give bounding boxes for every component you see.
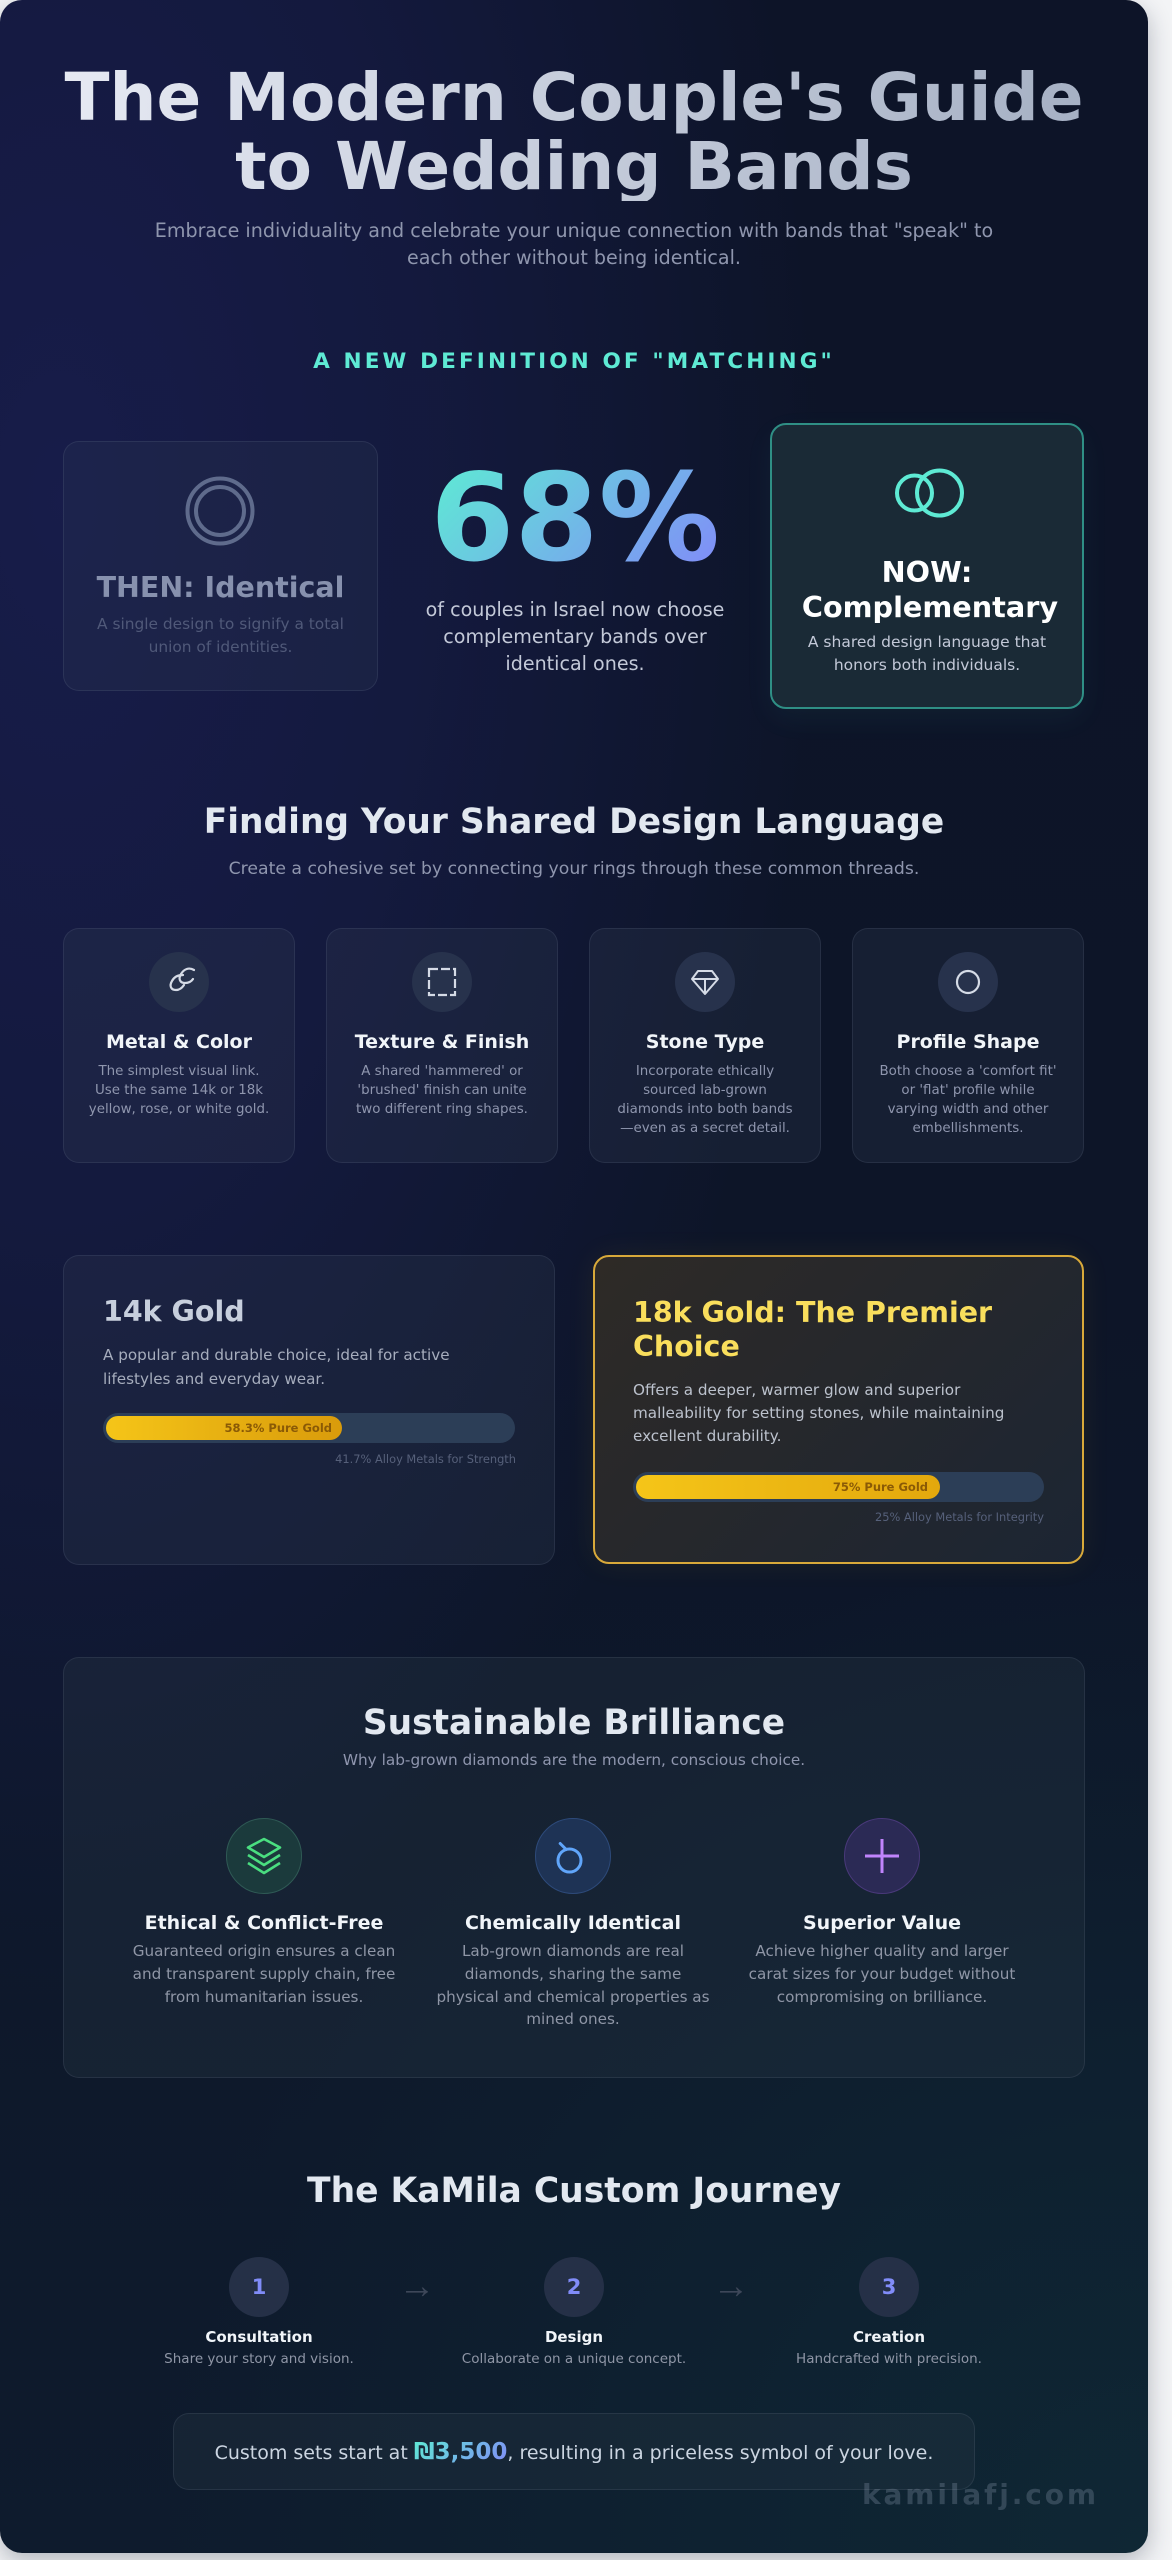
chemically text: mined ones. bbox=[526, 2010, 620, 2028]
benefit: chemically identical bbox=[436, 1818, 710, 2028]
sustainable heading: Sustainable Brilliance bbox=[363, 1702, 785, 1742]
step 3 number: 3 bbox=[882, 2275, 896, 2299]
step 1 text: Share your story and vision. bbox=[164, 2351, 354, 2367]
stat caption bbox=[426, 598, 724, 674]
stat caption: of couples in Israel now choose bbox=[426, 598, 724, 620]
profile text: or 'flat' profile while bbox=[901, 1083, 1035, 1098]
14k text bbox=[103, 1346, 450, 1388]
18k bar fill: 75% Pure Gold bbox=[833, 1480, 928, 1494]
icon: diamond bbox=[675, 952, 735, 1012]
icon: layers bbox=[226, 1818, 302, 1894]
icon: link bbox=[149, 952, 209, 1012]
18k heading: Choice bbox=[633, 1330, 740, 1363]
panel: metal and color bbox=[63, 928, 295, 1163]
step 3 title: Creation bbox=[853, 2328, 925, 2346]
subtitle: each other without being identical. bbox=[407, 246, 741, 268]
profile text: varying width and other bbox=[888, 1102, 1048, 1117]
stat: 68 percent bbox=[426, 448, 724, 674]
icon: single ring bbox=[186, 476, 254, 546]
panel: texture and finish bbox=[326, 928, 558, 1163]
superior heading: Superior Value bbox=[803, 1912, 961, 1934]
title: The Modern Couple's Guide bbox=[65, 59, 1083, 136]
now text: honors both individuals. bbox=[834, 656, 1020, 674]
superior text: compromising on brilliance. bbox=[777, 1988, 987, 2006]
icon: atom bbox=[535, 1818, 611, 1894]
stone text: sourced lab-grown bbox=[643, 1083, 767, 1098]
step 2 number bbox=[544, 2257, 604, 2317]
texture text bbox=[356, 1064, 528, 1117]
ethical text bbox=[133, 1942, 395, 2006]
stat number: 68% bbox=[430, 448, 720, 588]
chemically text: diamonds, sharing the same bbox=[465, 1965, 681, 1983]
18k heading bbox=[633, 1296, 992, 1363]
step 1 number: 1 bbox=[252, 2275, 266, 2299]
subheading: Create a cohesive set by connecting your rings through these common threads. bbox=[229, 859, 919, 879]
18k alloy note: 25% Alloy Metals for Integrity bbox=[875, 1510, 1044, 1524]
panel: 14k gold bbox=[63, 1255, 555, 1565]
18k text bbox=[633, 1380, 1004, 1444]
texture text: 'brushed' finish can unite bbox=[357, 1083, 527, 1098]
18k text: Offers a deeper, warmer glow and superior bbox=[633, 1380, 960, 1398]
step 3 bbox=[796, 2257, 982, 2367]
step 1 bbox=[164, 2257, 354, 2367]
ethical text: Guaranteed origin ensures a clean bbox=[133, 1942, 395, 1960]
profile heading: Profile Shape bbox=[897, 1031, 1039, 1053]
now text: A shared design language that bbox=[808, 632, 1046, 650]
profile text bbox=[879, 1064, 1057, 1136]
icon: dashed square bbox=[412, 952, 472, 1012]
14k bar fill: 58.3% Pure Gold bbox=[224, 1420, 332, 1434]
14k purity bar bbox=[103, 1412, 515, 1442]
callout: pricing bbox=[173, 2413, 975, 2490]
chemically text: Lab-grown diamonds are real bbox=[462, 1942, 684, 1960]
arrow 2: → bbox=[712, 2265, 750, 2306]
stone text: diamonds into both bands bbox=[617, 1102, 793, 1117]
chemically text: physical and chemical properties as bbox=[436, 1988, 710, 2006]
icon: plus bbox=[844, 1818, 920, 1894]
then heading: THEN: Identical bbox=[97, 571, 344, 604]
profile text: embellishments. bbox=[913, 1121, 1023, 1136]
subtitle bbox=[155, 218, 993, 268]
step 2 number: 2 bbox=[567, 2275, 581, 2299]
metal text: The simplest visual link. bbox=[98, 1064, 260, 1079]
14k bar fill bbox=[106, 1416, 342, 1440]
14k text: lifestyles and everyday wear. bbox=[103, 1370, 325, 1388]
14k text: A popular and durable choice, ideal for active bbox=[103, 1346, 450, 1364]
metal text bbox=[89, 1064, 269, 1117]
stat caption: identical ones. bbox=[505, 652, 645, 674]
14k heading: 14k Gold bbox=[103, 1295, 245, 1328]
step 2 title: Design bbox=[545, 2328, 603, 2346]
title bbox=[40, 63, 1108, 201]
stone text bbox=[617, 1064, 793, 1136]
ethical heading: Ethical & Conflict-Free bbox=[145, 1912, 383, 1934]
step 3 text: Handcrafted with precision. bbox=[796, 2351, 982, 2367]
panel: stone type bbox=[589, 928, 821, 1163]
now text bbox=[808, 632, 1046, 674]
now heading: Complementary bbox=[802, 590, 1058, 624]
ethical text: and transparent supply chain, free bbox=[133, 1965, 395, 1983]
benefit: ethical bbox=[133, 1818, 395, 2006]
arrow 1: → bbox=[398, 2265, 436, 2306]
superior text bbox=[749, 1942, 1015, 2006]
stone text: —even as a secret detail. bbox=[620, 1121, 790, 1136]
subtitle: Embrace individuality and celebrate your unique connection with bands that "speak" to bbox=[155, 218, 993, 242]
14k alloy note: 41.7% Alloy Metals for Strength bbox=[335, 1452, 516, 1466]
18k purity bar bbox=[633, 1472, 1044, 1502]
callout: pricing: Custom sets start at ₪3,500, resulting in a priceless symbol of your love. bbox=[215, 2439, 933, 2465]
now heading: NOW: bbox=[882, 555, 972, 589]
step 3 number bbox=[859, 2257, 919, 2317]
panel: sustainable brilliance bbox=[63, 1657, 1085, 2078]
metal text: Use the same 14k or 18k bbox=[95, 1083, 263, 1098]
now heading bbox=[802, 555, 1058, 624]
profile text: Both choose a 'comfort fit' bbox=[879, 1064, 1057, 1079]
texture heading: Texture & Finish bbox=[355, 1031, 529, 1053]
18k text: excellent durability. bbox=[633, 1426, 781, 1444]
stone heading: Stone Type bbox=[646, 1031, 764, 1053]
title: to Wedding Bands bbox=[235, 128, 913, 205]
superior text: Achieve higher quality and larger bbox=[755, 1942, 1009, 1960]
benefit: superior value bbox=[749, 1818, 1015, 2006]
then text: union of identities. bbox=[149, 638, 292, 656]
heading: shared design language: Finding Your Shared Design Language bbox=[204, 802, 944, 842]
section label: A NEW DEFINITION OF "MATCHING" bbox=[313, 349, 835, 374]
texture text: A shared 'hammered' or bbox=[361, 1064, 523, 1079]
stone text: Incorporate ethically bbox=[636, 1064, 774, 1079]
metal text: yellow, rose, or white gold. bbox=[89, 1102, 269, 1117]
panel: 18k gold bbox=[593, 1255, 1084, 1564]
icon: circle bbox=[938, 952, 998, 1012]
watermark: kamilafj.com bbox=[862, 2478, 1099, 2511]
icon: interlocked rings bbox=[895, 468, 964, 518]
metal heading: Metal & Color bbox=[106, 1031, 252, 1053]
step 1 number bbox=[229, 2257, 289, 2317]
texture text: two different ring shapes. bbox=[356, 1102, 528, 1117]
ethical text: from humanitarian issues. bbox=[165, 1988, 363, 2006]
then text: A single design to signify a total bbox=[97, 615, 344, 633]
panel: then identical bbox=[63, 441, 378, 691]
superior text: carat sizes for your budget without bbox=[749, 1965, 1015, 1983]
panel: profile shape bbox=[852, 928, 1084, 1163]
chemically heading: Chemically Identical bbox=[465, 1912, 681, 1934]
then text bbox=[97, 615, 344, 656]
step 2 text: Collaborate on a unique concept. bbox=[462, 2351, 686, 2367]
18k heading: 18k Gold: The Premier bbox=[633, 1296, 992, 1329]
heading: custom journey: The KaMila Custom Journey bbox=[307, 2171, 841, 2211]
sustainable subheading: Why lab-grown diamonds are the modern, conscious choice. bbox=[343, 1750, 805, 1768]
18k bar fill bbox=[636, 1475, 940, 1499]
18k text: malleability for setting stones, while maintaining bbox=[633, 1404, 1004, 1422]
stat caption: complementary bands over bbox=[443, 624, 707, 648]
step 1 title: Consultation bbox=[205, 2328, 313, 2346]
panel: now complementary bbox=[770, 423, 1084, 709]
step 2 bbox=[462, 2257, 686, 2367]
chemically text bbox=[436, 1942, 710, 2028]
